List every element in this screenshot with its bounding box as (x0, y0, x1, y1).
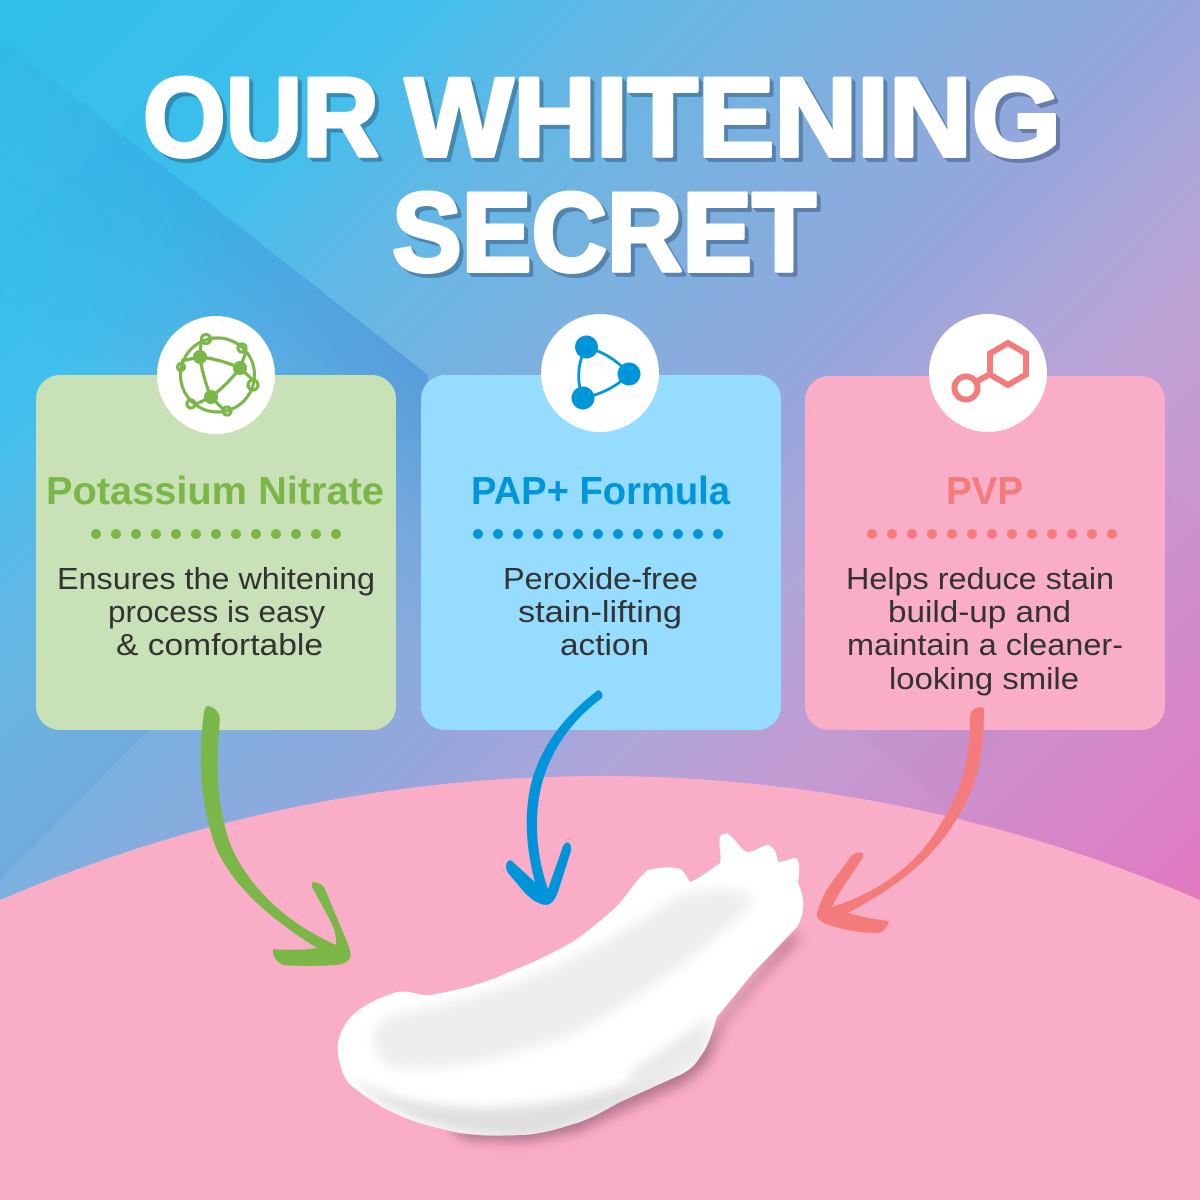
title (143, 55, 1065, 299)
heading: Potassium Nitrate: Potassium Nitrate (46, 470, 384, 513)
heading: PVP: PVP (946, 470, 1023, 513)
title: SECRET (392, 170, 816, 295)
description text: Peroxide-free (503, 561, 698, 596)
panel: PVP (805, 314, 1165, 730)
title: WHITENING (407, 57, 1063, 182)
title: WHITENING (405, 55, 1061, 180)
dotted divider (91, 529, 341, 539)
description text: build-up and (888, 594, 1071, 629)
title: WHITENING (409, 59, 1065, 184)
title: OUR (143, 55, 379, 180)
gradient background (0, 0, 1200, 900)
description text: Helps reduce stain (846, 561, 1114, 596)
description text (503, 561, 698, 662)
title: OUR (145, 57, 381, 182)
title: SECRET (394, 172, 818, 297)
pink ground curve (0, 776, 1200, 1200)
description text: action (560, 627, 649, 662)
description text: maintain a cleaner- (847, 627, 1123, 662)
description text: looking smile (889, 661, 1079, 696)
description text (846, 561, 1123, 696)
title: OUR (147, 59, 383, 184)
description text: Ensures the whitening (57, 561, 375, 596)
description text: process is easy (108, 594, 326, 629)
arrow: coral (817, 707, 984, 933)
cream swatch (330, 825, 810, 1145)
icon: blue three-node molecule (541, 314, 659, 432)
icon: coral hexagon and ring (929, 314, 1047, 432)
panel: Potassium Nitrate (36, 316, 396, 730)
title: SECRET (396, 174, 820, 299)
description text: & comfortable (116, 627, 323, 662)
description text: stain-lifting (518, 594, 682, 629)
dotted divider (867, 529, 1117, 539)
description text (57, 561, 375, 662)
dotted divider (473, 529, 723, 539)
panel: PAP+ Formula (421, 314, 781, 730)
arrow: green (201, 706, 351, 966)
arrow: blue (506, 690, 602, 905)
heading: PAP+ Formula: PAP+ Formula (471, 470, 730, 513)
icon: green molecular sphere (157, 316, 275, 434)
